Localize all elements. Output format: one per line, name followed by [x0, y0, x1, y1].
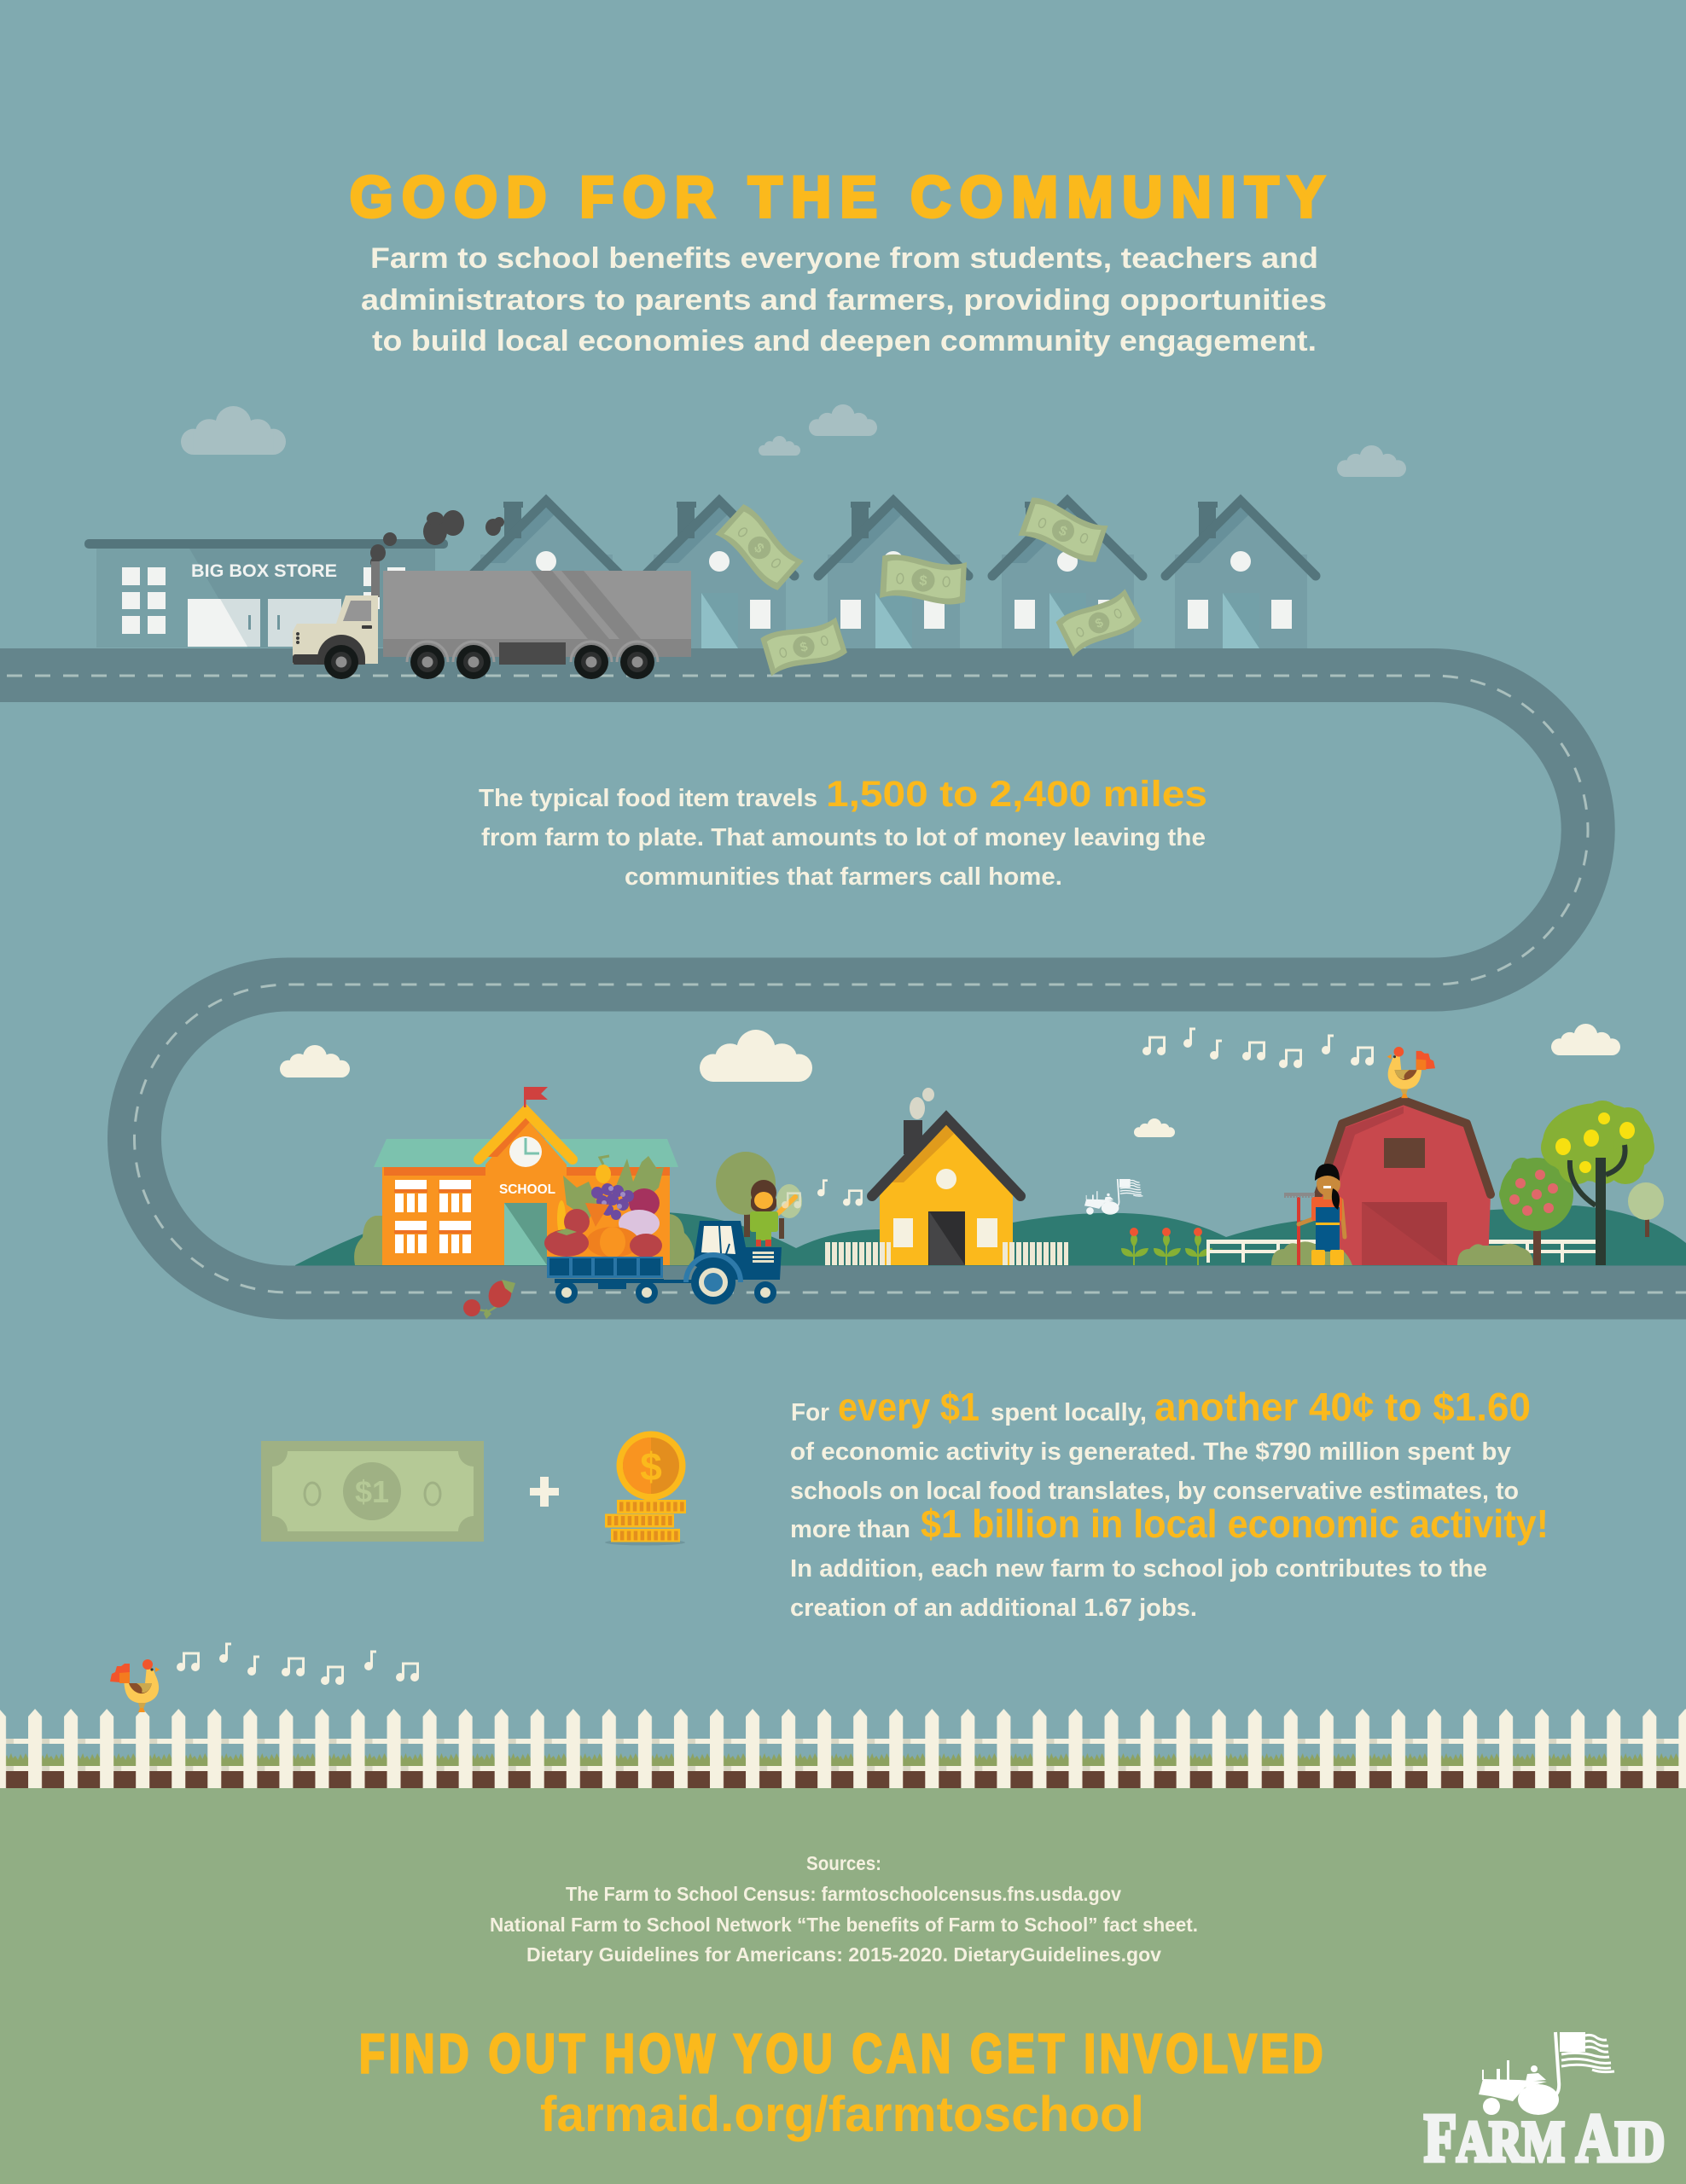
trailer [547, 1257, 663, 1278]
school door [504, 1203, 547, 1265]
school sign: SCHOOL [499, 1182, 555, 1197]
intro text block: administrators to parents and farmers, providing opportunities [361, 284, 1327, 317]
winding road [0, 676, 1686, 1292]
economic impact text block: $1 billion in local economic activity! [921, 1502, 1549, 1546]
school flag [524, 1087, 526, 1107]
economic impact text block: more than [790, 1516, 910, 1543]
flying dollar bills: $ [1056, 523, 1069, 540]
yellow house [872, 1088, 1020, 1265]
flying dollar bills: $ [799, 639, 810, 655]
truck cab [293, 595, 378, 664]
grey clouds [181, 404, 1406, 477]
economic impact text block: another 40¢ to $1.60 [1154, 1385, 1531, 1429]
economic impact text block: For [791, 1399, 829, 1426]
icon: dollar bill [261, 1441, 484, 1542]
icon: coin stack: $ [640, 1444, 662, 1489]
tractor body [693, 1221, 782, 1280]
rooster on barn [1387, 1047, 1435, 1098]
white rail fences [1206, 1240, 1596, 1263]
farm aid logo [1424, 2032, 1665, 2176]
economic impact text block [790, 1385, 1549, 1622]
tiny tractor silhouette on hill [1084, 1179, 1142, 1215]
row of houses [471, 501, 1316, 648]
school [354, 1087, 695, 1265]
icon: plus sign [530, 1477, 559, 1507]
intro text block: to build local economies and deepen community engagement. [372, 325, 1317, 357]
truck [293, 510, 691, 679]
title: GOOD FOR THE COMMUNITY [350, 165, 1334, 229]
fence music notes [177, 1644, 419, 1685]
flying dollar bills [714, 495, 1143, 677]
pale small tree [1628, 1182, 1664, 1237]
flying dollar bills: $ [751, 540, 767, 556]
economic impact text block: spent locally, [991, 1399, 1147, 1426]
cream clouds [280, 1024, 1620, 1137]
icon: dollar bill: $1 [355, 1474, 389, 1509]
sources text block: Dietary Guidelines for Americans: 2015-2020. DietaryGuidelines.gov [526, 1943, 1161, 1966]
red barn [1318, 1101, 1491, 1265]
picket fences by yellow house [825, 1242, 1068, 1265]
sources text block [490, 1852, 1198, 1966]
truck smoke [370, 510, 504, 567]
bushes by barn [1271, 1241, 1533, 1265]
truck wheels [407, 642, 658, 662]
big box store [84, 539, 448, 648]
food miles text block: communities that farmers call home. [625, 863, 1062, 891]
fallen strawberry and cherry [463, 1278, 515, 1319]
call to action heading: FIND OUT HOW YOU CAN GET INVOLVED [359, 2023, 1327, 2084]
intro text block: Farm to school benefits everyone from students, teachers and [370, 242, 1318, 275]
girl on tractor [750, 1180, 795, 1246]
flying dollar bills: $ [1093, 615, 1106, 631]
rooster on fence [110, 1659, 160, 1712]
school clock [509, 1136, 542, 1167]
economic impact text block: of economic activity is generated. The $790 million spent by [790, 1438, 1511, 1466]
vegetable pile [544, 1156, 664, 1258]
food miles text block: from farm to plate. That amounts to lot of money leaving the [481, 824, 1206, 851]
economic impact text block: creation of an additional 1.67 jobs. [790, 1594, 1197, 1622]
farmer with rake [1284, 1164, 1345, 1265]
sources text block: National Farm to School Network “The benefits of Farm to School” fact sheet. [490, 1914, 1198, 1936]
tractor wheels [691, 1260, 735, 1304]
food miles text block: The typical food item travels [479, 785, 817, 812]
apple tree [1499, 1158, 1573, 1265]
barn music notes [1142, 1029, 1374, 1068]
big box store sign: BIG BOX STORE [191, 561, 337, 581]
white picket fence [0, 1709, 1686, 1788]
tractor and trailer [547, 1221, 782, 1304]
farm aid logo: FARM AID [1424, 2101, 1665, 2176]
music notes near girl [782, 1181, 863, 1209]
food miles text block [479, 774, 1207, 891]
flying dollar bills: $ [918, 572, 927, 589]
call to action url: farmaid.org/farmtoschool [540, 2087, 1144, 2142]
icon: coin stack [605, 1432, 686, 1546]
truck trailer [383, 571, 691, 657]
economic impact text block: every $1 [838, 1385, 980, 1429]
economic impact text block: schools on local food translates, by conservative estimates, to [790, 1478, 1519, 1505]
hills [295, 1205, 1686, 1271]
economic impact text block: In addition, each new farm to school job contributes to the [790, 1555, 1487, 1583]
sources text block: Sources: [806, 1852, 881, 1874]
school tower [485, 1118, 567, 1265]
food miles text block: 1,500 to 2,400 miles [826, 774, 1207, 815]
school windows [395, 1180, 471, 1253]
intro text block [361, 242, 1327, 357]
sources text block: The Farm to School Census: farmtoschoolcensus.fns.usda.gov [566, 1883, 1121, 1905]
flowers [1121, 1228, 1212, 1265]
footer panel [0, 1788, 1686, 2184]
lemon tree [1541, 1101, 1654, 1265]
tree behind girl [716, 1152, 802, 1239]
